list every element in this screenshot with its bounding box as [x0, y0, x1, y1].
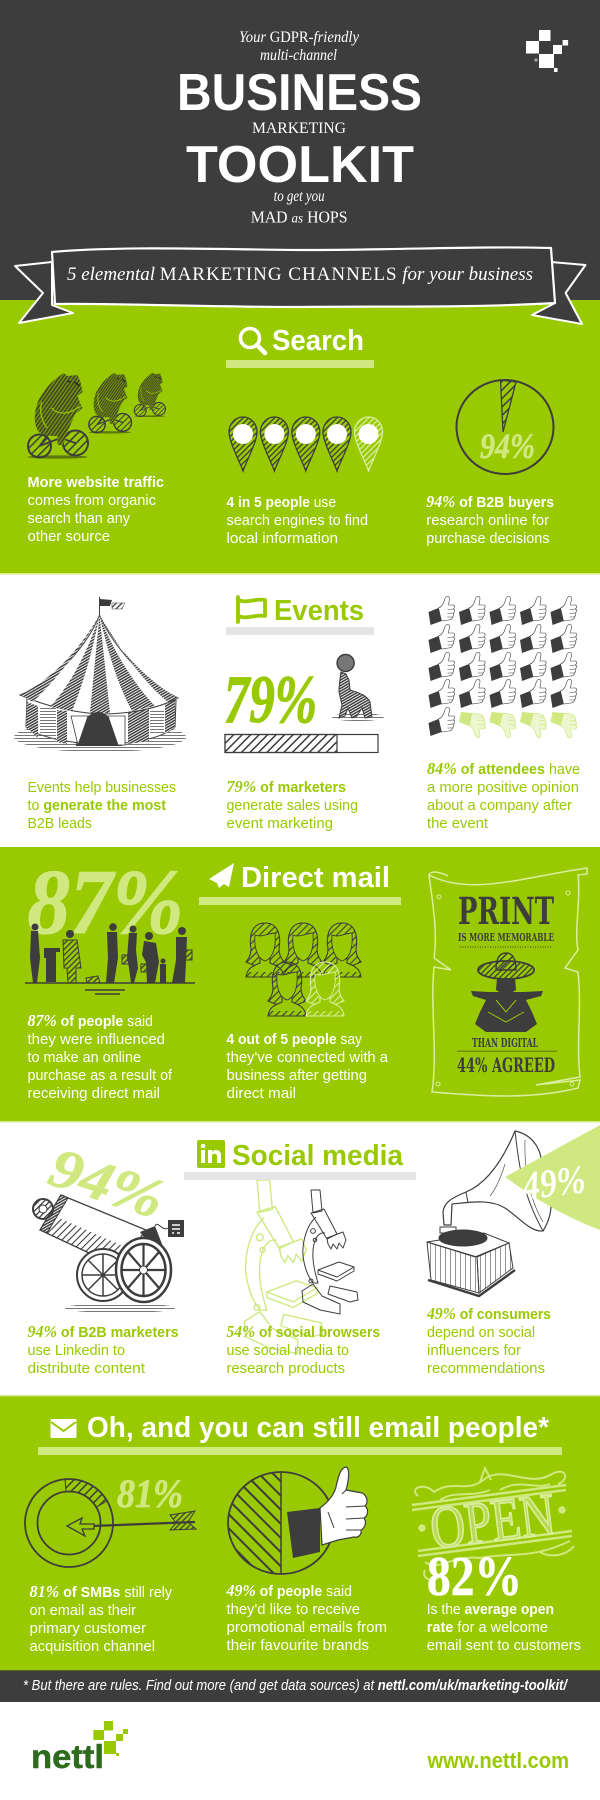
- text: influencers: depend on social: [427, 1324, 535, 1341]
- text: influencers: recommendations: [427, 1360, 545, 1377]
- illustration: seal with ball: [332, 654, 384, 721]
- heading: email: Oh, and you can still email people*: [87, 1412, 550, 1444]
- icon: five location pins: [229, 417, 382, 471]
- panel: social media: [0, 1122, 600, 1395]
- icon: nettl squares white: [526, 30, 568, 72]
- text: B2B buyers: 94% of B2B buyers: [426, 492, 554, 511]
- progress bar: 79 percent: [225, 734, 378, 752]
- text: direct mail influence: receiving direct mail: [28, 1085, 160, 1102]
- text: attendees: 84% of attendees have: [427, 759, 580, 778]
- text: search engines: 4 in 5 people use: [226, 494, 336, 511]
- text: promotional emails: they'd like to receive: [226, 1601, 360, 1618]
- text: promotional emails: [226, 1581, 387, 1654]
- text: linkedin: [28, 1322, 178, 1377]
- text: linkedin: use Linkedin to: [28, 1342, 125, 1359]
- text: attendees: a more positive opinion: [427, 779, 579, 796]
- text: influencers: 49% of consumers: [426, 1304, 551, 1323]
- text: website traffic: other source: [28, 528, 110, 545]
- text: marketers: 79% of marketers: [226, 777, 346, 796]
- text: open rate: [427, 1601, 581, 1654]
- text: B2B buyers: research online for: [426, 512, 549, 529]
- text: connected with a business: they've connected with a: [226, 1049, 389, 1066]
- footnote bar: * But there are rules. Find out more (and get data sources) at nettl.com/uk/marketing-toolkit/: [23, 1677, 569, 1694]
- title: multi-channel: [260, 47, 337, 64]
- chart: thumbs up and down grid: [428, 596, 577, 738]
- poster: print is more memorable: [429, 868, 587, 1096]
- heading: direct mail: [199, 862, 401, 905]
- text: influencers: [426, 1304, 551, 1377]
- stat: 82 percent: 82%: [427, 1546, 522, 1608]
- text: B2B leads: Events help businesses: [28, 779, 176, 796]
- illustration: gramophone: [427, 1131, 551, 1296]
- text: open rate: rate for a welcome: [427, 1619, 548, 1636]
- banner text: 5 elemental MARKETING CHANNELS for your business: [67, 264, 533, 285]
- chart: target with arrow: 81%: [117, 1471, 183, 1516]
- text: connected with a business: direct mail: [226, 1085, 296, 1102]
- text: search engines: local information: [226, 530, 338, 547]
- text: website traffic: [28, 474, 164, 545]
- heading: search: [226, 325, 374, 368]
- text: social browsers: use social media to: [226, 1342, 349, 1359]
- text: social browsers: 54% of social browsers: [226, 1322, 380, 1341]
- text: attendees: about a company after: [427, 797, 572, 814]
- text: SMBs: primary customer: [30, 1620, 146, 1637]
- text: marketers: event marketing: [226, 815, 333, 832]
- panel: events: [0, 574, 600, 847]
- title: to get you: [274, 188, 325, 205]
- text: influencers: influencers for: [427, 1342, 521, 1359]
- text: attendees: the event: [427, 815, 489, 832]
- heading: social media: Social media: [232, 1140, 404, 1172]
- illustration: cannon: [33, 1195, 184, 1313]
- text: direct mail influence: to make an online: [28, 1049, 141, 1066]
- heading: events: Events: [274, 595, 364, 627]
- text: SMBs: on email as their: [30, 1602, 136, 1619]
- text: SMBs: 81% of SMBs still rely: [30, 1582, 172, 1601]
- illustration: man in sombrero: [471, 953, 543, 1032]
- heading: search: Search: [272, 325, 364, 357]
- text: marketers: [226, 777, 358, 832]
- text: direct mail influence: purchase as a result of: [28, 1067, 173, 1084]
- text: social browsers: [226, 1322, 380, 1377]
- text: connected with a business: 4 out of 5 people say: [226, 1031, 362, 1048]
- panel: search: [0, 300, 600, 574]
- panel: direct mail: [0, 847, 600, 1122]
- text: open rate: Is the average open: [427, 1601, 554, 1618]
- illustration: microscope light: [244, 1180, 323, 1354]
- heading: social media: [184, 1140, 416, 1180]
- text: linkedin: distribute content: [28, 1360, 146, 1377]
- text: B2B leads: to generate the most: [28, 797, 166, 814]
- chart: pie with thumbs up: [228, 1467, 368, 1574]
- text: promotional emails: their favourite brands: [226, 1637, 369, 1654]
- text: B2B leads: B2B leads: [28, 815, 92, 832]
- poster: print is more memorable: PRINT: [458, 889, 554, 933]
- text: direct mail influence: they were influenced: [28, 1031, 165, 1048]
- illustration: three bears on bicycles: [28, 373, 165, 459]
- text: B2B leads: [28, 779, 176, 832]
- callout: 49 percent wedge: 49%: [519, 1156, 588, 1209]
- footer logo: nettl: [31, 1721, 128, 1775]
- title: BUSINESS: [177, 64, 422, 122]
- banner ribbon: [15, 247, 586, 324]
- illustration: people queue: [25, 923, 195, 994]
- text: website traffic: comes from organic: [28, 492, 156, 509]
- panel: header: [0, 0, 600, 324]
- text: open rate: email sent to customers: [427, 1637, 581, 1654]
- text: search engines: search engines to find: [226, 512, 368, 529]
- stat: 79 percent: 79%: [224, 661, 317, 737]
- callout: 49 percent wedge: [505, 1125, 600, 1230]
- heading: direct mail: Direct mail: [241, 862, 390, 894]
- text: direct mail influence: [28, 1011, 173, 1102]
- poster: print is more memorable: IS MORE MEMORABLE: [458, 931, 554, 944]
- text: linkedin: 94% of B2B marketers: [28, 1322, 178, 1341]
- text: website traffic: search than any: [28, 510, 130, 527]
- panel: email: [0, 1395, 600, 1670]
- text: website traffic: More website traffic: [28, 474, 164, 491]
- text: connected with a business: [226, 1031, 389, 1102]
- chart: 94 percent pie: 94%: [480, 426, 535, 466]
- illustration: microscope dark: [302, 1190, 358, 1314]
- text: search engines: [226, 494, 368, 547]
- heading: email: [38, 1412, 562, 1455]
- text: connected with a business: business after getting: [226, 1067, 367, 1084]
- footer logo: nettl: nettl: [31, 1738, 104, 1775]
- text: promotional emails: 49% of people said: [226, 1581, 352, 1600]
- illustration: OPEN ornament: OPEN: [427, 1481, 559, 1561]
- icon: thumb up hand: [287, 1467, 368, 1558]
- title: [177, 29, 422, 227]
- illustration: circus tent: [14, 597, 186, 752]
- footer url: www.nettl.com: [427, 1748, 569, 1773]
- chart: target with arrow: [25, 1471, 196, 1567]
- title: Your GDPR-friendly: [239, 29, 359, 46]
- heading: events: [226, 595, 374, 635]
- poster: print is more memorable: THAN DIGITAL: [472, 1035, 538, 1050]
- footnote bar: [0, 1670, 600, 1702]
- text: direct mail influence: 87% of people said: [28, 1011, 153, 1030]
- title: TOOLKIT: [186, 136, 414, 194]
- stat: 87 percent: 87%: [28, 851, 184, 953]
- icon group: five women: [246, 923, 361, 1016]
- text: B2B buyers: [426, 492, 554, 547]
- title: MAD as HOPS: [251, 208, 348, 227]
- text: social browsers: research products: [226, 1360, 345, 1377]
- text: marketers: generate sales using: [226, 797, 358, 814]
- text: SMBs: acquisition channel: [30, 1638, 155, 1655]
- text: SMBs: [30, 1582, 172, 1655]
- chart: 94 percent pie: [456, 380, 554, 474]
- illustration: OPEN ornament: [412, 1468, 574, 1580]
- stat: 94 percent: 94%: [42, 1136, 171, 1231]
- text: promotional emails: promotional emails from: [226, 1619, 387, 1636]
- text: attendees: [427, 759, 580, 832]
- title: MARKETING: [252, 120, 346, 137]
- text: B2B buyers: purchase decisions: [426, 530, 550, 547]
